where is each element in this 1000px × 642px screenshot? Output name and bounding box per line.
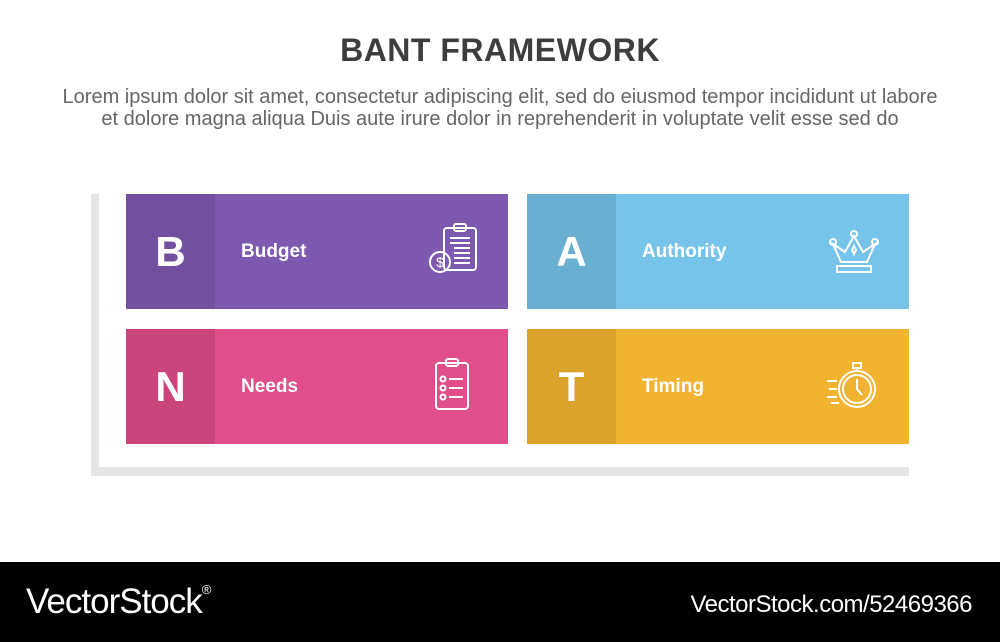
icon: budget clipboard: $ (436, 254, 444, 270)
icon: crown (829, 230, 879, 273)
panel: Authority: A (556, 228, 587, 275)
panel: Needs: N (155, 363, 186, 410)
footer logo: VectorStock® (26, 582, 210, 621)
bracket frame (91, 194, 909, 476)
panel: Budget: Budget (241, 241, 306, 262)
footer url: VectorStock.com/52469366 (690, 591, 972, 618)
panel: Timing: Timing (642, 376, 704, 397)
subtitle text: Lorem ipsum dolor sit amet, consectetur adipiscing elit, sed do eiusmod tempor incididunt ut labore (63, 86, 937, 108)
subtitle text (63, 86, 937, 130)
panel: Budget (126, 194, 508, 309)
footer bar (0, 562, 1000, 642)
subtitle text: et dolore magna aliqua Duis aute irure dolor in reprehenderit in voluptate velit esse sed do (101, 108, 899, 130)
panel: Authority (527, 194, 909, 309)
panel: Authority: Authority (642, 241, 726, 262)
icon: checklist (435, 358, 469, 410)
icon: budget clipboard (429, 223, 477, 273)
panel: Timing: T (559, 363, 584, 410)
panel: Budget: B (155, 228, 186, 275)
icon: stopwatch (827, 362, 876, 408)
panel: Needs: Needs (241, 376, 298, 397)
title: BANT FRAMEWORK (340, 32, 660, 68)
panel: Needs (126, 329, 508, 444)
panel: Timing (527, 329, 909, 444)
